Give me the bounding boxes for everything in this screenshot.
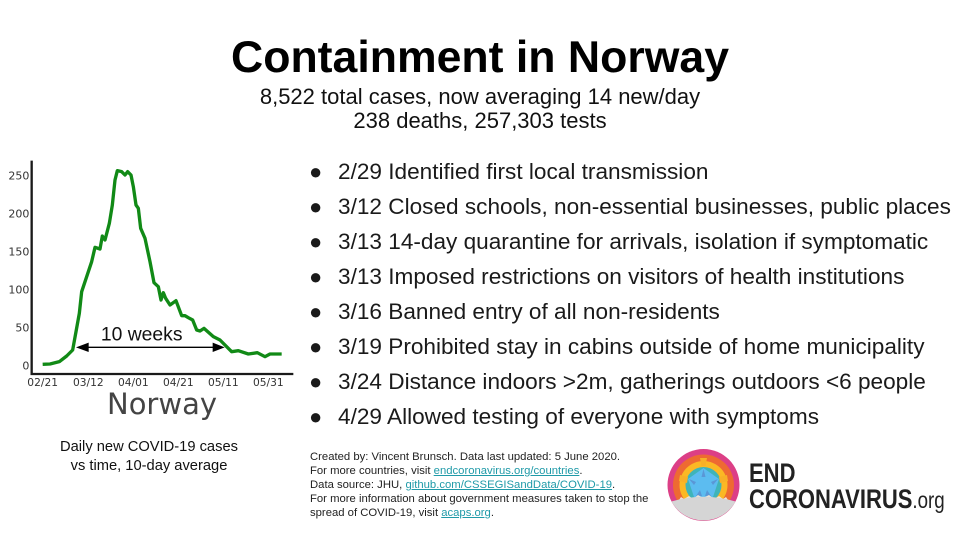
subtitle: totals: 238 deaths, 257,303 tests <box>353 108 607 133</box>
measure 8: 4/29 Allowed testing of everyone with symptoms <box>338 404 819 429</box>
measure 7: ● <box>309 369 322 394</box>
y axis labels: 100 <box>8 283 29 296</box>
measures timeline list <box>309 159 951 429</box>
y axis labels: 150 <box>8 245 29 258</box>
subtitle: totals: 8,522 total cases, now averaging 14 new/day <box>260 84 700 109</box>
source notes: For more countries, visit endcoronavirus.org/countries. <box>310 465 582 477</box>
x axis labels: 02/21 <box>27 376 58 389</box>
y axis labels: 50 <box>15 321 29 334</box>
x axis labels: 05/11 <box>208 376 239 389</box>
measure 3: ● <box>309 229 322 254</box>
logo wordmark <box>749 458 945 514</box>
source notes: For more information about government measures taken to stop the <box>310 493 648 505</box>
chart country label: Norway <box>107 387 217 421</box>
chart caption: vs time, 10-day average <box>71 458 227 474</box>
subtitle: totals <box>260 84 700 133</box>
measure 4: ● <box>309 264 322 289</box>
icon: rainbow virus emblem <box>668 449 740 521</box>
source notes: Created by: Vincent Brunsch. Data last updated: 5 June 2020. <box>310 451 620 463</box>
x axis labels: 03/12 <box>73 376 104 389</box>
measure 5: 3/16 Banned entry of all non-residents <box>338 299 720 324</box>
measure 7: 3/24 Distance indoors >2m, gatherings outdoors <6 people <box>338 369 926 394</box>
x axis labels: 04/01 <box>118 376 149 389</box>
x axis labels: 05/31 <box>253 376 284 389</box>
x axis labels: 04/21 <box>163 376 194 389</box>
arrow: 10 weeks span <box>76 343 225 352</box>
measure 8: ● <box>309 404 322 429</box>
measure 1: ● <box>309 159 322 184</box>
green case curve <box>43 171 282 364</box>
source notes: spread of COVID-19, visit acaps.org. <box>310 507 494 519</box>
measure 2: 3/12 Closed schools, non-essential businesses, public places <box>338 194 951 219</box>
measure 6: 3/19 Prohibited stay in cabins outside of home municipality <box>338 334 925 359</box>
source notes: Data source: JHU, github.com/CSSEGISandData/COVID-19. <box>310 479 615 491</box>
y axis labels: 200 <box>8 207 29 220</box>
logo: EndCoronavirus.org <box>668 449 945 521</box>
line chart: daily new cases <box>8 160 294 389</box>
logo wordmark: CORONAVIRUS.org <box>749 484 945 514</box>
measure 4: 3/13 Imposed restrictions on visitors of health institutions <box>338 264 904 289</box>
y axis labels: 0 <box>22 359 29 372</box>
measure 1: 2/29 Identified first local transmission <box>338 159 708 184</box>
title: Containment in Norway <box>231 33 729 82</box>
chart axes <box>32 161 293 374</box>
logo wordmark: END <box>749 458 795 488</box>
measure 6: ● <box>309 334 322 359</box>
chart caption: Daily new COVID-19 cases <box>60 439 238 455</box>
measure 5: ● <box>309 299 322 324</box>
x axis labels <box>27 376 284 389</box>
y axis labels: 250 <box>8 169 29 182</box>
measure 2: ● <box>309 194 322 219</box>
chart caption <box>60 439 238 474</box>
y axis labels <box>8 169 29 372</box>
measure 3: 3/13 14-day quarantine for arrivals, isolation if symptomatic <box>338 229 928 254</box>
label: 10 weeks: 10 weeks <box>101 325 182 346</box>
source notes <box>310 451 648 519</box>
